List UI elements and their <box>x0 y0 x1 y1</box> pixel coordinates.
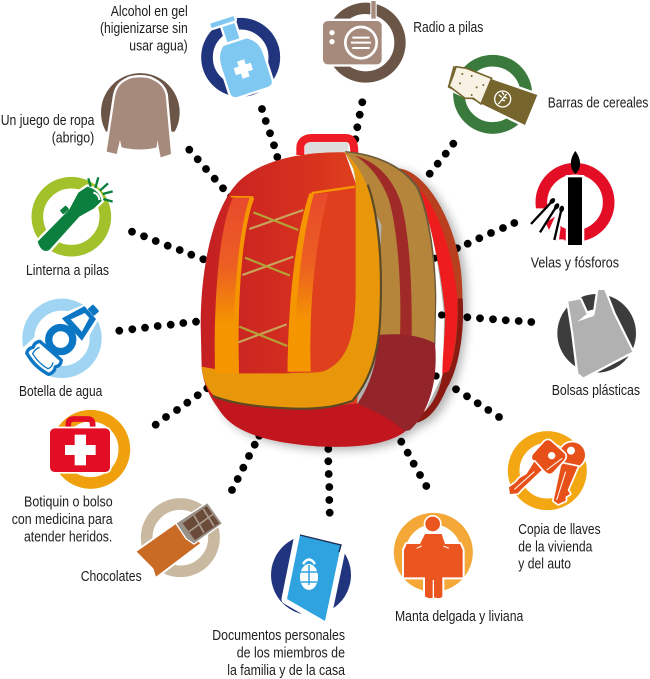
front key <box>509 438 567 494</box>
back panel <box>345 151 436 432</box>
label: Alcohol en gel: usar agua) <box>129 39 188 55</box>
label: Alcohol en gel: Alcohol en gel <box>111 4 188 20</box>
backpack <box>201 138 467 450</box>
label: Velas y fósforos: Velas y fósforos <box>531 255 619 271</box>
icon: keys <box>509 437 585 504</box>
icon: identity document <box>271 535 351 621</box>
label: Alcohol en gel: (higienizarse sin <box>100 21 188 37</box>
connector: velas <box>430 219 518 262</box>
connector dots visible in strap gap <box>431 255 445 380</box>
icon: chocolate bar <box>137 503 222 577</box>
connector: documentos <box>324 445 334 517</box>
back key <box>554 442 585 504</box>
label: Un juego de ropa: (abrigo) <box>52 131 94 147</box>
icon: candle and matches <box>531 151 609 247</box>
connector: botiquin <box>152 384 211 429</box>
label: Copia de llaves: de la vivienda <box>518 540 593 556</box>
icon: plastic bag <box>565 290 632 377</box>
icon: flashlight <box>37 177 113 251</box>
connector: radio <box>351 98 366 143</box>
label: Alcohol en gel <box>100 4 188 55</box>
label: Botiquin: atender heridos. <box>24 530 112 546</box>
label: Chocolates: Chocolates <box>81 569 142 585</box>
icon: hand sanitizer <box>207 11 274 99</box>
label: Documentos <box>212 628 346 679</box>
label: Documentos: la familia y de la casa <box>227 663 346 679</box>
carry handle <box>300 138 354 155</box>
label: Radio a pilas: Radio a pilas <box>413 20 483 36</box>
label: Botella de agua: Botella de agua <box>19 384 103 400</box>
backpack shadow <box>215 162 467 450</box>
shoulder strap <box>398 168 463 423</box>
icon: sweater <box>101 73 180 157</box>
icon: water bottle <box>23 295 109 377</box>
label: Documentos: de los miembros de <box>237 646 345 662</box>
connector: alcohol <box>258 105 281 161</box>
icon: first aid kit <box>50 416 124 483</box>
label: Un juego de ropa: Un juego de ropa <box>1 113 95 129</box>
connector: ropa <box>185 146 235 201</box>
label: Botiquin <box>12 495 113 546</box>
icon: radio <box>323 1 400 77</box>
connector: llaves <box>432 372 503 421</box>
label: Manta delgada y liviana: Manta delgada y liviana <box>395 609 524 625</box>
white gap behind strap <box>410 188 444 425</box>
connector: bolsas <box>438 311 535 326</box>
connector: botella <box>115 318 200 335</box>
label: Documentos: Documentos personales <box>212 628 345 644</box>
connector: barras <box>426 140 457 178</box>
label: Copia de llaves <box>518 522 601 572</box>
connector: chocolates <box>228 432 263 494</box>
label: Un juego de ropa <box>1 113 95 147</box>
front straps and laces <box>215 187 355 373</box>
label: Copia de llaves: y del auto <box>518 556 571 572</box>
label: Copia de llaves: Copia de llaves <box>518 522 601 538</box>
label: Botiquin: Botiquin o bolso <box>24 495 113 511</box>
dotted connectors <box>115 98 535 517</box>
connector: manta <box>397 438 430 490</box>
label: Linterna a pilas: Linterna a pilas <box>26 263 109 279</box>
label: Botiquin: con medicina para <box>12 512 113 528</box>
icon: blanket person <box>400 517 467 598</box>
front body <box>201 152 405 447</box>
icon: cereal bar <box>448 61 537 128</box>
connector: linterna <box>128 228 207 263</box>
